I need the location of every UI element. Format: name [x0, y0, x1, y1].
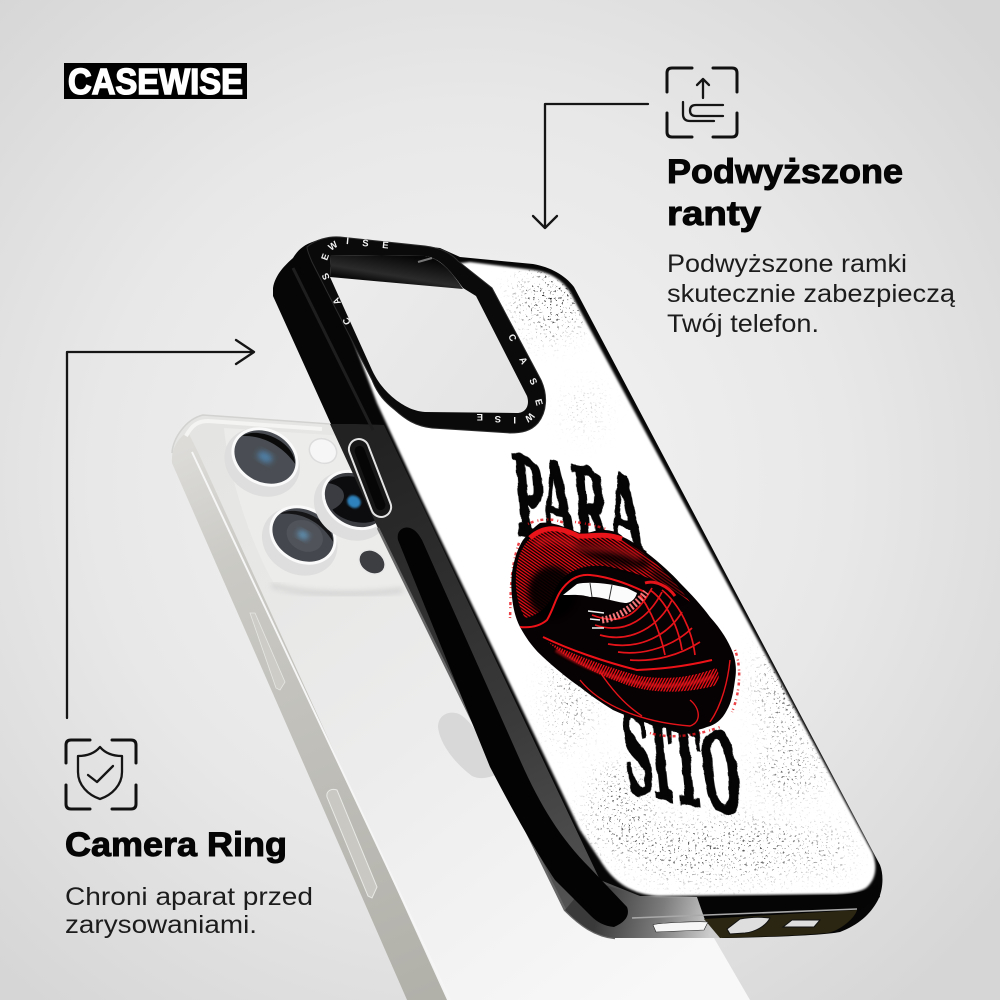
foot olive lower: [704, 910, 857, 938]
arrow: camera ring: [67, 340, 254, 718]
lower lip outline: [543, 637, 712, 670]
right foot black band: [697, 884, 880, 920]
foot translucent area: [565, 880, 722, 938]
upper wall highlight: [293, 268, 373, 430]
charging port holes: [653, 917, 820, 934]
text: raised edges description: skutecznie zabezpieczą: [667, 280, 955, 308]
side frame strip: [172, 432, 447, 1000]
mouth outline: [520, 575, 645, 627]
heading: raised edges: ranty: [667, 195, 761, 233]
lips base: [511, 523, 736, 730]
black case: [273, 236, 890, 938]
heading: raised edges: [667, 153, 903, 233]
translucent bumper section: [330, 424, 720, 938]
text: raised edges description: Podwyższone ramki: [667, 250, 907, 278]
side button: [327, 789, 377, 898]
ring lettering lower: CASEWISE: [477, 332, 544, 425]
text: camera ring description: [65, 883, 313, 939]
text: raised edges description: Twój telefon.: [667, 310, 819, 338]
ring lettering: CASEWISE: [319, 236, 389, 326]
red splatter: [510, 520, 739, 736]
case body: [273, 237, 882, 938]
heading: raised edges: Podwyższone: [667, 153, 903, 191]
text: camera ring description: zarysowaniami.: [65, 911, 257, 939]
upper lip hatching: [516, 529, 690, 618]
icon: shield with check: [66, 740, 136, 809]
tongue arcs: [592, 582, 700, 660]
lens 2: [301, 456, 403, 555]
lower lip highlight: [556, 650, 714, 686]
camera plateau: [224, 428, 420, 592]
lens 3: [250, 492, 351, 589]
teeth gaps: [590, 583, 612, 600]
ring inner wall: [330, 255, 463, 289]
apple logo silhouette: [438, 713, 500, 778]
text: raised edges description: [667, 250, 955, 338]
white phone behind the case: [172, 414, 750, 1000]
foot highlight line: [632, 909, 857, 918]
back panel: [330, 262, 875, 896]
lens 1: [212, 414, 313, 510]
ring opening: [330, 255, 528, 413]
tongue pink speckle: [602, 592, 646, 620]
flash: [305, 434, 341, 468]
heading: camera ring: Camera Ring: [65, 826, 287, 864]
PARA lettering: PARA: [510, 429, 648, 581]
lips artwork: [510, 429, 746, 844]
side button on case: [346, 436, 394, 520]
teeth: [563, 583, 637, 603]
camera ring: [307, 236, 546, 433]
lower lip hatching: [548, 642, 719, 692]
text: camera ring description: Chroni aparat przed: [65, 883, 313, 911]
brand logo: CASEWISE: [68, 61, 243, 102]
lidar sensor: [354, 545, 390, 579]
arrow: raised edges: [533, 104, 648, 228]
upper lip shadow: [528, 566, 576, 618]
SITO lettering: SITO: [617, 683, 746, 844]
lower lip contour: [580, 660, 730, 726]
icon: raised edges: [667, 68, 737, 137]
volume button: [250, 613, 285, 690]
long slot: [398, 528, 628, 927]
grunge speckle: [500, 268, 866, 896]
upper lip highlight: [530, 529, 622, 539]
